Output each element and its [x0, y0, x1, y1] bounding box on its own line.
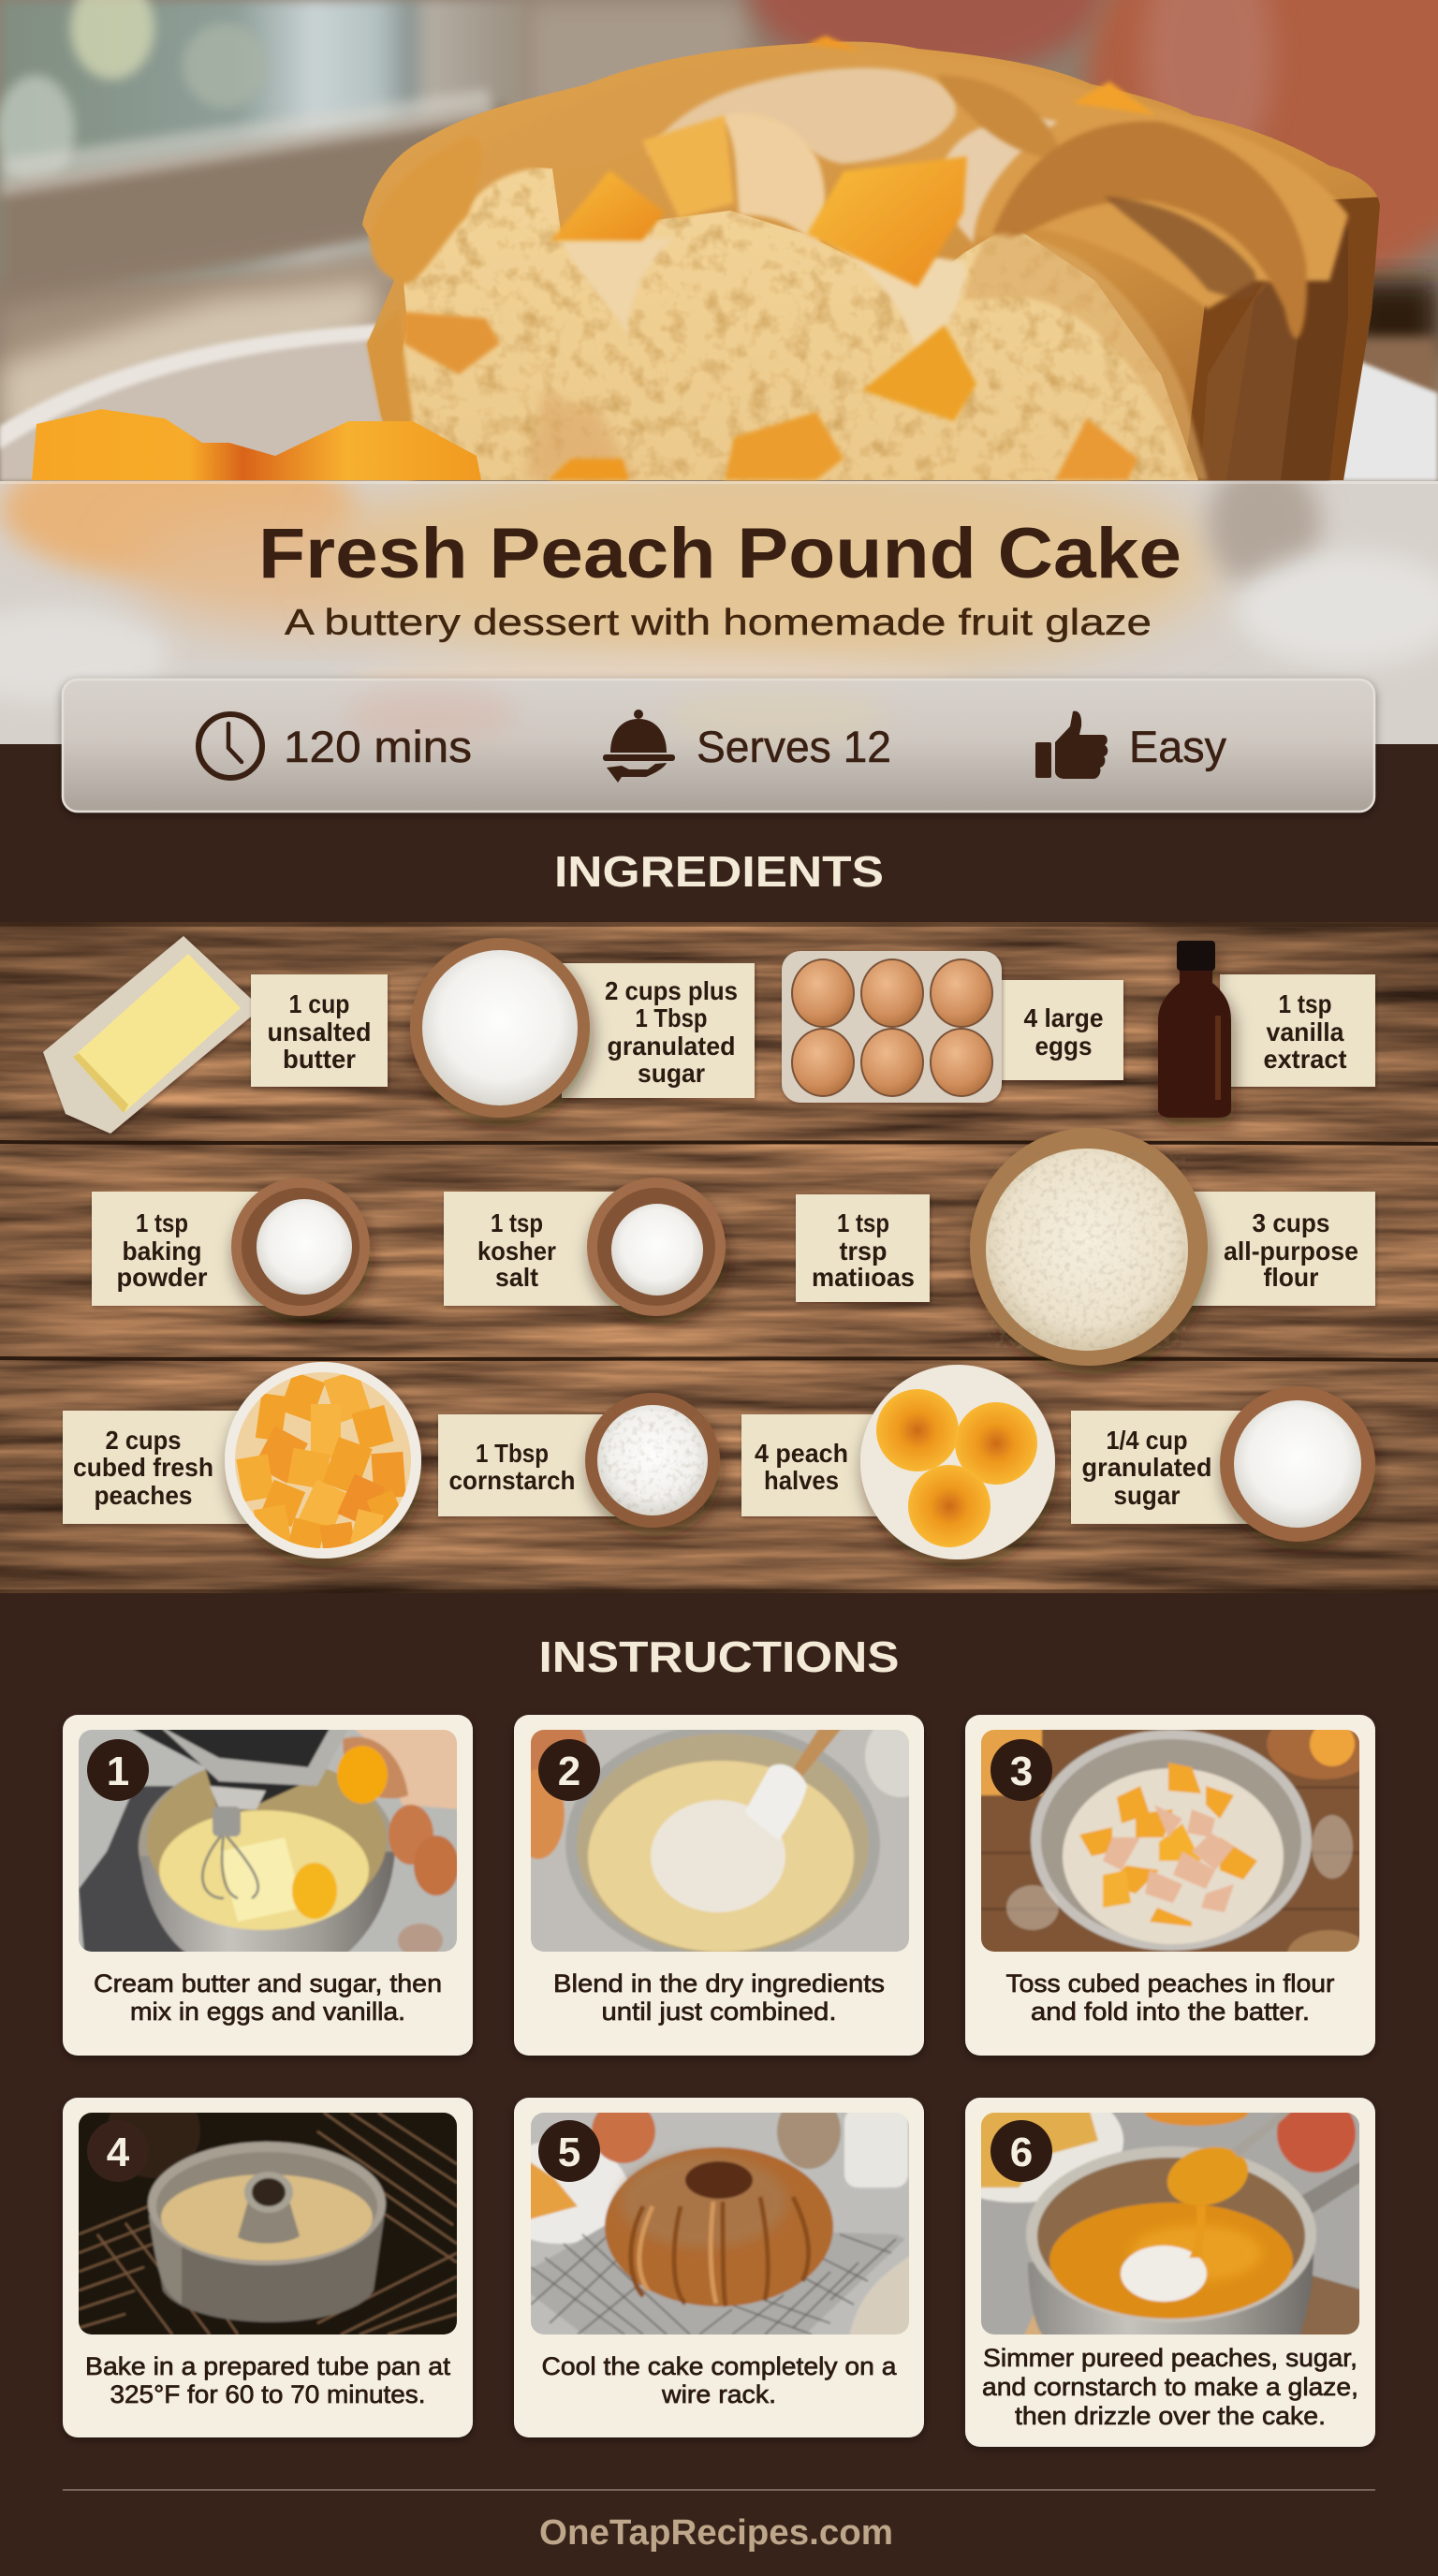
label: vanilla: extract: [1264, 1045, 1346, 1074]
ingredient: flour bowl: [970, 1128, 1208, 1366]
label: sugar: sugar: [638, 1059, 705, 1088]
step 1 card: [63, 1715, 473, 2056]
label: kosher salt: 1 tsp: [491, 1208, 543, 1237]
subtitle: A buttery dessert with homemade fruit glaze: [285, 603, 1152, 643]
title: Fresh Peach Pound Cake: [258, 514, 1181, 593]
badge 3: [990, 1739, 1052, 1801]
label: eggs: 4 large: [1024, 1003, 1103, 1032]
label: cubed peaches: peaches: [94, 1481, 193, 1510]
label: eggs: [992, 980, 1123, 1080]
label: quarter cup sugar: 1/4 cup: [1107, 1426, 1187, 1455]
label: vanilla: vanilla: [1266, 1017, 1344, 1046]
hero photo: glazed peach pound cake on plate: [0, 0, 1438, 487]
step 1 text: mix in eggs and vanilla.: [130, 1998, 405, 2026]
label: quarter cup sugar: granulated: [1082, 1453, 1211, 1482]
label: eggs: eggs: [1035, 1032, 1092, 1061]
label: vanilla: [1220, 974, 1375, 1087]
stat: time: 120 mins: [284, 722, 472, 771]
step 2 text: [553, 1969, 885, 2026]
step 5 text: [541, 2352, 898, 2408]
peach slices on plate: [32, 409, 481, 480]
label: kosher salt: kosher: [477, 1237, 556, 1266]
wood table ingredients panel: [0, 922, 1438, 1593]
icon: thumbs up: [1035, 711, 1108, 779]
label: cubed peaches: [63, 1411, 250, 1524]
step 5 image: cooling bundt cake: [489, 2094, 914, 2339]
butter stick: [73, 954, 241, 1113]
step 4 card: [63, 2085, 473, 2437]
label: sugar: [562, 963, 755, 1098]
step 3 text: and fold into the batter.: [1031, 1998, 1310, 2026]
stat: difficulty: Easy: [1129, 722, 1226, 771]
step 6 text: and cornstarch to make a glaze,: [982, 2373, 1358, 2401]
label: flour: [1180, 1192, 1375, 1306]
label: butter: [251, 974, 388, 1087]
badge 1: 1: [107, 1749, 129, 1794]
step 3 text: Toss cubed peaches in flour: [1005, 1969, 1335, 1998]
label: cubed peaches: 2 cups: [105, 1426, 182, 1455]
step 2 text: Blend in the dry ingredients: [553, 1969, 885, 1998]
stat: servings: Serves 12: [697, 722, 891, 771]
step 2 text: until just combined.: [601, 1998, 837, 2026]
ingredient: egg carton: [782, 951, 1002, 1103]
ingredient: butter: [43, 936, 261, 1134]
badge 6: 6: [1010, 2130, 1033, 2175]
label: quarter cup sugar: [1071, 1411, 1249, 1524]
cake body: [356, 28, 1395, 487]
label: baking powder: baking: [122, 1237, 202, 1266]
badge 1: [87, 1739, 149, 1801]
label: vanilla: 1 tsp: [1279, 989, 1331, 1018]
label: sugar: 2 cups plus: [605, 976, 738, 1005]
translucent title band: [0, 481, 1438, 744]
label: kosher salt: [444, 1192, 631, 1306]
step 6 image: simmering glaze: [914, 2079, 1364, 2339]
label: garbled ingredient: [796, 1194, 930, 1302]
step 1 text: [94, 1969, 442, 2026]
step 2 image: batter and flour: [531, 1730, 909, 1952]
step 2 card: [512, 1713, 936, 2056]
label: sugar: 1 Tbsp: [635, 1003, 708, 1032]
badge 4: [87, 2120, 149, 2182]
label: butter: butter: [283, 1045, 356, 1074]
label: garbled ingredient: matiıoas: [812, 1263, 915, 1292]
step 6 text: [982, 2344, 1358, 2430]
label: cubed peaches: cubed fresh: [73, 1453, 213, 1482]
icon: serving cloche: [603, 710, 675, 783]
step 4 text: [85, 2352, 451, 2408]
step 5 text: wire rack.: [661, 2380, 776, 2408]
stats panel: [63, 680, 1374, 812]
step 6 text: then drizzle over the cake.: [1015, 2402, 1326, 2430]
label: flour: flour: [1264, 1263, 1319, 1292]
step 5 text: Cool the cake completely on a: [541, 2352, 898, 2380]
step 5 card: [489, 2094, 924, 2437]
heading: ingredients: INGREDIENTS: [554, 847, 884, 896]
ingredient: bowl of cubed peaches: [225, 1362, 421, 1559]
label: baking powder: 1 tsp: [136, 1208, 188, 1237]
step 3 card: [965, 1708, 1379, 2056]
label: garbled ingredient: trsp: [839, 1237, 888, 1266]
step 6 card: [914, 2079, 1375, 2447]
ingredient: cornstarch bowl: [585, 1393, 720, 1528]
step 4 text: Bake in a prepared tube pan at: [85, 2352, 451, 2380]
ingredient: salt bowl: [587, 1178, 726, 1316]
label: sugar: granulated: [607, 1032, 736, 1061]
step 3 text: [1005, 1969, 1335, 2026]
badge 3: 3: [1010, 1749, 1033, 1794]
label: garbled ingredient: 1 tsp: [837, 1208, 889, 1237]
label: peach halves: halves: [764, 1466, 839, 1495]
peach chunks in cake: [404, 36, 1155, 480]
badge 4: 4: [107, 2130, 130, 2175]
step 4 image: tube pan in oven: [74, 2085, 462, 2339]
badge 5: 5: [558, 2130, 580, 2175]
step 4 text: 325°F for 60 to 70 minutes.: [110, 2380, 425, 2408]
label: butter: unsalted: [268, 1017, 371, 1046]
label: baking powder: [92, 1192, 270, 1306]
ingredient: sugar bowl: [410, 938, 590, 1118]
label: butter: 1 cup: [288, 989, 350, 1018]
cake crumb face: [365, 159, 1208, 487]
ingredient: plate of peach halves: [860, 1365, 1055, 1559]
label: flour: 3 cups: [1253, 1208, 1329, 1237]
label: baking powder: powder: [116, 1263, 208, 1292]
ingredient: vanilla bottle: [1158, 941, 1231, 1118]
label: peach halves: 4 peach: [755, 1439, 848, 1468]
step 3 image: peaches in flour: [976, 1708, 1379, 1979]
label: cornstarch: [438, 1414, 616, 1516]
badge 2: 2: [558, 1749, 580, 1794]
step 6 text: Simmer pureed peaches, sugar,: [983, 2344, 1357, 2372]
badge 2: [538, 1739, 600, 1801]
ingredient: baking powder bowl: [231, 1178, 370, 1316]
icon: clock: [198, 714, 262, 778]
step 1 text: Cream butter and sugar, then: [94, 1969, 442, 1998]
label: cornstarch: cornstarch: [449, 1466, 575, 1495]
label: kosher salt: salt: [495, 1263, 538, 1292]
ingredient: sugar bowl small: [1220, 1386, 1375, 1542]
heading: instructions: INSTRUCTIONS: [539, 1632, 899, 1681]
badge 5: [538, 2120, 600, 2182]
glaze and crust top: [367, 51, 1348, 480]
label: cornstarch: 1 Tbsp: [476, 1439, 549, 1468]
label: quarter cup sugar: sugar: [1114, 1481, 1181, 1510]
badge 6: [990, 2120, 1052, 2182]
label: peach halves: [741, 1414, 882, 1516]
step 1 image: stand mixer: [74, 1725, 462, 1957]
label: flour: all-purpose: [1224, 1237, 1358, 1266]
footer website: OneTapRecipes.com: [539, 2513, 893, 2553]
butter wrapper: [43, 936, 261, 1134]
